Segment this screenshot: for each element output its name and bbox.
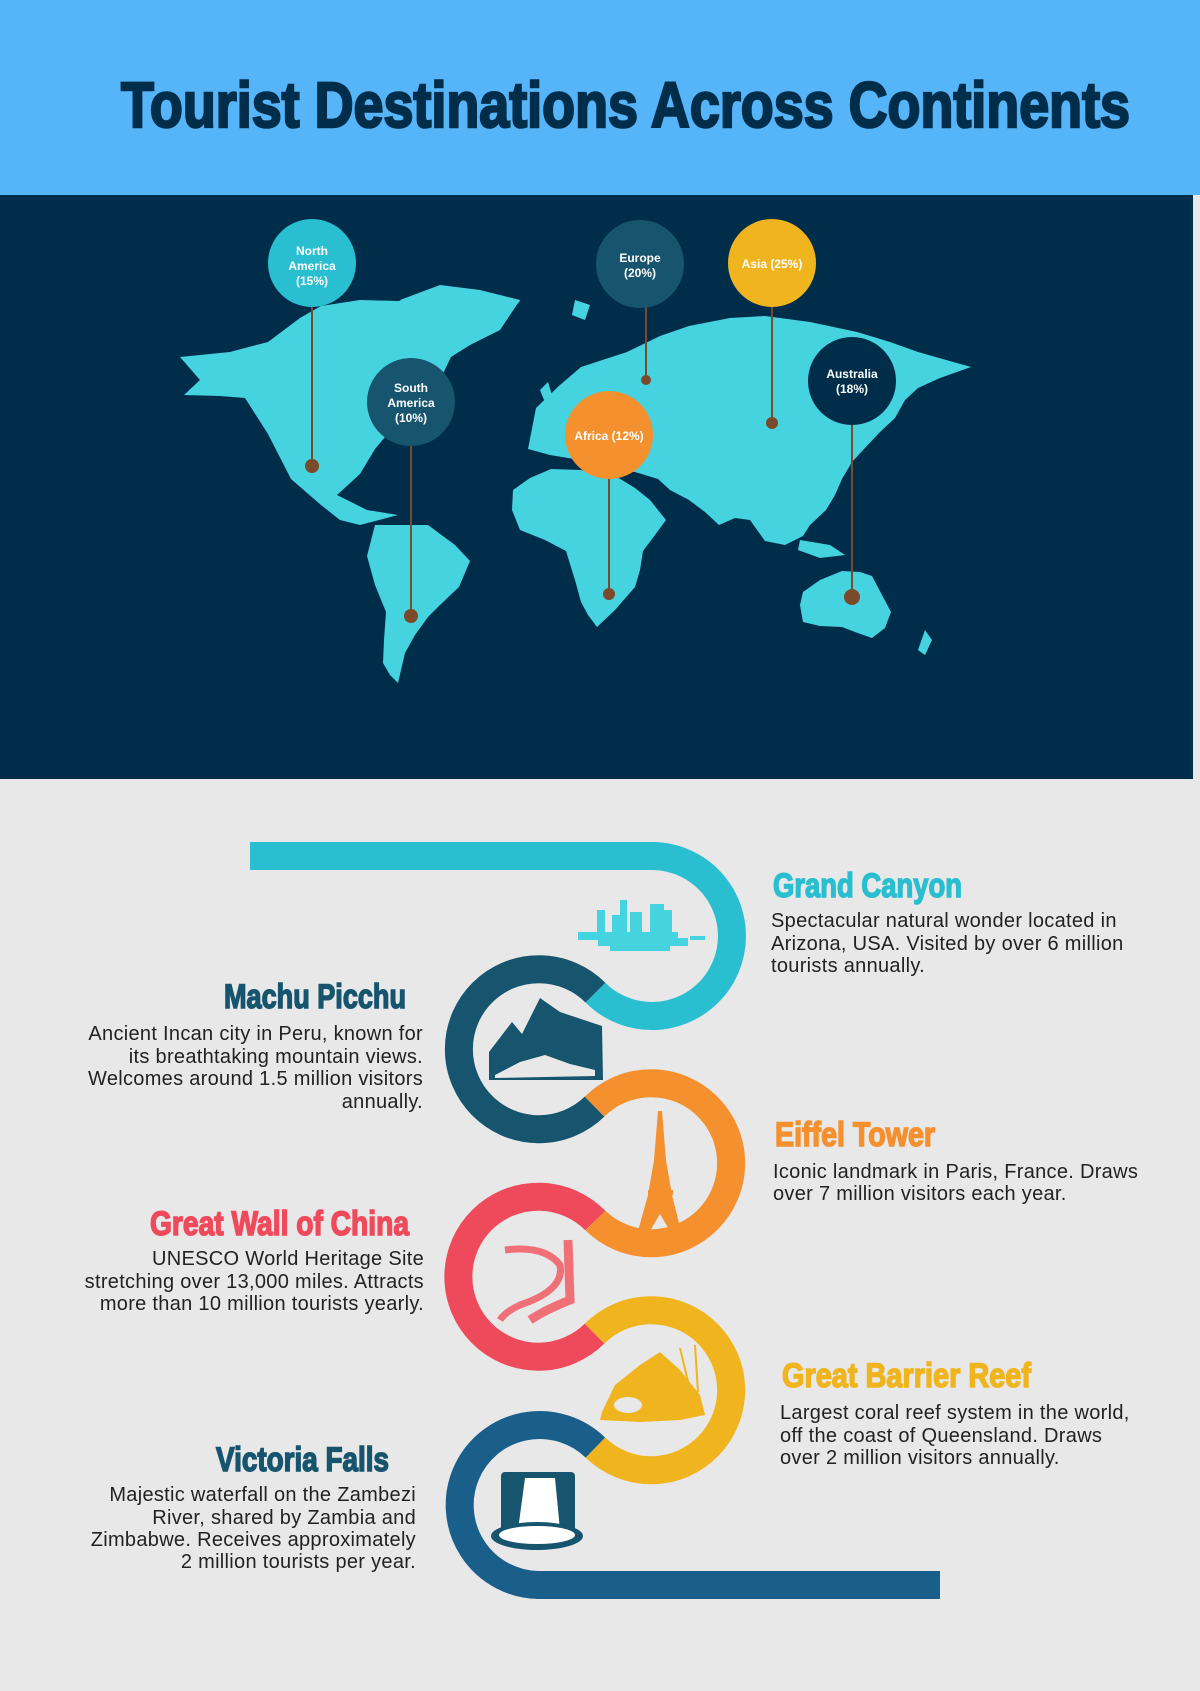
text: great barrier reef: Great Barrier Reef	[782, 1357, 1032, 1395]
map: continents	[180, 285, 971, 683]
text: machu picchu: annually.	[342, 1091, 423, 1113]
panel: world map	[0, 195, 1193, 779]
text: victoria falls: Zimbabwe. Receives approximately	[91, 1529, 416, 1551]
text: victoria falls: River, shared by Zambia and	[152, 1507, 416, 1529]
text: machu picchu	[88, 978, 423, 1113]
text: great wall of china: more than 10 million tourists yearly.	[100, 1293, 424, 1315]
text: great wall of china	[85, 1205, 424, 1315]
text: victoria falls: Majestic waterfall on the Zambezi	[109, 1484, 416, 1506]
text: eiffel tower: over 7 million visitors each year.	[773, 1183, 1067, 1205]
bubble: North America: (15%)	[296, 274, 328, 288]
text: great wall of china: Great Wall of China	[150, 1205, 410, 1243]
text: eiffel tower: Eiffel Tower	[775, 1116, 935, 1154]
text: eiffel tower: Iconic landmark in Paris, France. Draws	[773, 1161, 1138, 1183]
bubble: Europe: Europe	[619, 251, 661, 265]
text: grand canyon	[771, 867, 1124, 977]
bubble: South America: South	[394, 381, 428, 395]
bubble: Asia	[728, 219, 816, 307]
text: grand canyon: tourists annually.	[771, 955, 925, 977]
header	[0, 0, 1200, 195]
text: eiffel tower	[773, 1116, 1138, 1205]
text: great barrier reef: over 2 million visitors annually.	[780, 1447, 1060, 1469]
bubble: Asia: Asia (25%)	[742, 257, 802, 271]
text: great barrier reef: off the coast of Queensland. Draws	[780, 1425, 1102, 1447]
marker lines	[312, 263, 852, 616]
text: machu picchu: Ancient Incan city in Peru, known for	[88, 1023, 423, 1045]
text: machu picchu: Machu Picchu	[224, 978, 406, 1016]
bubble: South America: (10%)	[395, 411, 427, 425]
text: great wall of china: stretching over 13,000 miles. Attracts	[85, 1271, 424, 1293]
text: grand canyon: Grand Canyon	[773, 867, 962, 905]
icon: machu picchu	[489, 998, 603, 1080]
text: grand canyon: Arizona, USA. Visited by over 6 million	[771, 933, 1124, 955]
text: machu picchu: Welcomes around 1.5 million visitors	[88, 1068, 423, 1090]
bubble: Europe: (20%)	[624, 266, 656, 280]
text: victoria falls	[91, 1441, 416, 1573]
icon: eiffel tower	[638, 1111, 681, 1231]
text: great wall of china: UNESCO World Heritage Site	[152, 1248, 424, 1270]
text: grand canyon: Spectacular natural wonder located in	[771, 910, 1117, 932]
text: great barrier reef: Largest coral reef system in the world,	[780, 1402, 1130, 1424]
icon: great wall	[500, 1240, 570, 1320]
text: victoria falls: 2 million tourists per year.	[181, 1551, 416, 1573]
bubble: Europe	[596, 220, 684, 308]
bubble: North America: America	[288, 259, 336, 273]
bubble: Africa: Africa (12%)	[574, 429, 644, 443]
bubble: Australia: Australia	[826, 367, 878, 381]
timeline path	[250, 856, 940, 1585]
bubble: Africa	[565, 391, 653, 479]
bubble: North America: North	[296, 244, 328, 258]
text: victoria falls: Victoria Falls	[216, 1441, 389, 1479]
bubble: Australia: (18%)	[836, 382, 868, 396]
bubble: North America	[268, 219, 356, 307]
text: machu picchu: its breathtaking mountain views.	[129, 1046, 423, 1068]
text: great barrier reef	[780, 1357, 1130, 1469]
marker dots	[305, 375, 860, 623]
icon: great barrier reef	[600, 1345, 705, 1422]
icon: grand canyon	[578, 900, 705, 951]
icon: victoria falls	[491, 1472, 583, 1550]
bubble: Australia	[808, 337, 896, 425]
bubble: South America	[367, 358, 455, 446]
bubble: South America: America	[387, 396, 435, 410]
